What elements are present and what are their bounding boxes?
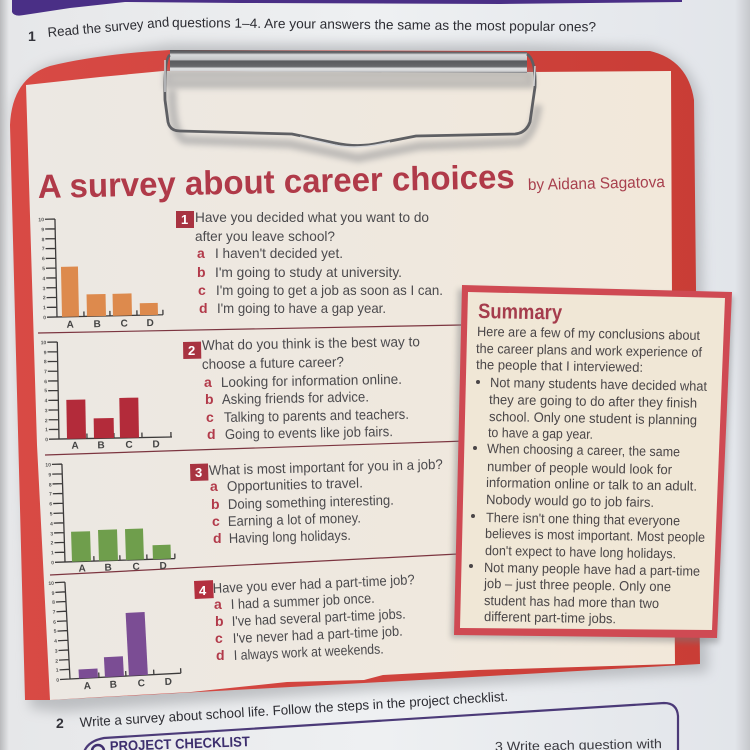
bar chart 2: B xyxy=(97,440,105,451)
bar chart 2: 8 xyxy=(44,359,47,365)
bar chart 3: A xyxy=(78,563,86,575)
bar chart 3: B xyxy=(104,563,112,574)
panel: summary: There isn't one thing that everyone xyxy=(486,510,680,528)
bar chart 1: 8 xyxy=(42,237,45,243)
bar chart 3: 7 xyxy=(49,491,52,497)
instruction 1: 1 xyxy=(28,28,36,44)
panel: summary: the career plans and work experience of xyxy=(476,341,702,360)
question 3: Doing something interesting. xyxy=(228,492,394,512)
bar chart 2: 2 xyxy=(45,418,48,424)
clipboard board xyxy=(10,50,700,700)
bar chart 2: 9 xyxy=(44,350,47,356)
instruction 2: Write a survey about school life. Follow the steps in the project checklist. xyxy=(79,689,508,730)
question 1: after you leave school? xyxy=(195,228,335,244)
question 3: d xyxy=(213,530,222,546)
question 1: I'm going to get a job as soon as I can. xyxy=(216,282,443,298)
question 1: b xyxy=(197,264,206,280)
bar chart 1: 10 xyxy=(38,217,44,223)
question 1: d xyxy=(199,300,208,316)
bar chart 3: 3 xyxy=(50,531,53,537)
bar chart 4 xyxy=(48,574,182,694)
bar chart 3: C xyxy=(132,562,140,573)
bar chart 4: 5 xyxy=(54,629,57,635)
question 1: Have you decided what you want to do xyxy=(195,209,429,225)
bar chart 1: 5 xyxy=(42,266,45,272)
bar chart 4: 6 xyxy=(53,620,56,626)
bar chart 3: 9 xyxy=(48,472,52,478)
bar chart 4: D xyxy=(164,677,172,688)
bar chart 3: 0 xyxy=(51,560,54,566)
question 4: Have you ever had a part-time job? xyxy=(212,571,415,596)
question 3: a xyxy=(210,478,218,494)
bar chart 3: 5 xyxy=(50,511,53,517)
panel: summary: believes is most important. Most people xyxy=(485,526,705,545)
bar chart 2: D xyxy=(152,439,160,450)
title: A survey about career choices xyxy=(37,159,515,206)
bar chart 3: 8 xyxy=(49,482,52,488)
question 3: What is most important for you in a job? xyxy=(209,456,443,478)
bar chart 3: D xyxy=(159,561,167,572)
bar chart 1: 4 xyxy=(42,276,45,282)
question 4: I had a summer job once. xyxy=(230,590,375,612)
panel: summary: the people that I interviewed: xyxy=(476,357,643,375)
bar chart 1: 6 xyxy=(42,256,45,262)
question 2: 2 xyxy=(188,343,195,358)
panel: summary: student has had more than two xyxy=(484,593,659,611)
bar chart 4: 4 xyxy=(54,639,57,645)
question 2: b xyxy=(205,391,214,407)
panel: summary: Not many students have decided what xyxy=(490,375,707,394)
bar chart 3: 6 xyxy=(49,501,52,507)
bar chart 1 xyxy=(38,215,163,331)
question 2: Looking for information online. xyxy=(221,371,402,390)
question 2: a xyxy=(204,374,212,390)
bar chart 2: 3 xyxy=(45,408,48,414)
panel: summary: school. Only one student is planning xyxy=(489,409,697,428)
bar chart 2: A xyxy=(71,441,79,452)
bar chart 4: 9 xyxy=(52,591,55,597)
question 3: 3 xyxy=(195,465,202,480)
bar chart 2: 10 xyxy=(41,340,47,346)
question 4 xyxy=(194,571,415,663)
panel: summary: different part-time jobs. xyxy=(484,609,616,626)
clip shadow xyxy=(168,74,538,158)
panel: summary: information online or talk to an adult. xyxy=(486,475,697,494)
question 2: Going to events like job fairs. xyxy=(225,423,393,442)
bar chart 3: 2 xyxy=(51,540,54,546)
question 4: I always work at weekends. xyxy=(233,640,384,663)
bar chart 1: D xyxy=(146,318,154,329)
bar chart 2: 6 xyxy=(44,379,47,385)
bar chart 2: 1 xyxy=(45,427,48,433)
question 2: What do you think is the best way to xyxy=(202,333,420,353)
panel: summary xyxy=(451,285,734,643)
question 3 xyxy=(190,456,443,546)
question 1: I'm going to have a gap year. xyxy=(217,300,386,316)
wire loop xyxy=(165,54,535,147)
question 2: choose a future career? xyxy=(202,354,344,372)
bar chart 4: 0 xyxy=(56,678,59,684)
panel: summary: to have a gap year. xyxy=(488,425,593,442)
question 1 xyxy=(176,209,443,316)
question 4: I've had several part-time jobs. xyxy=(231,605,406,629)
question 4: b xyxy=(215,613,224,629)
question 2: Talking to parents and teachers. xyxy=(224,406,409,425)
bar chart 3 xyxy=(45,459,175,576)
purple header band xyxy=(12,0,682,16)
bar chart 1: B xyxy=(93,319,101,330)
question 3: Earning a lot of money. xyxy=(228,510,361,529)
bar chart 3: 1 xyxy=(51,550,54,556)
question 2: c xyxy=(206,409,214,425)
bar chart 1: 9 xyxy=(41,227,44,233)
bar chart 4: 2 xyxy=(55,659,58,665)
bar chart 2: 0 xyxy=(45,437,48,443)
question 4: I've never had a part-time job. xyxy=(232,623,403,646)
question 4: a xyxy=(214,596,222,612)
panel: summary: number of people would look for xyxy=(487,459,673,477)
bar chart 4: 3 xyxy=(55,649,58,655)
bar chart 2: 4 xyxy=(45,398,48,404)
bar chart 1: C xyxy=(120,319,128,330)
question 3: Opportunities to travel. xyxy=(227,474,363,494)
question 4: 4 xyxy=(199,583,207,598)
question 4: c xyxy=(215,630,223,646)
question 2: Asking friends for advice. xyxy=(222,388,369,407)
bar chart 1: 2 xyxy=(43,295,46,301)
bar chart 4: B xyxy=(109,680,117,691)
project checklist box xyxy=(84,703,678,750)
question 1: I'm going to study at university. xyxy=(215,264,402,280)
bar chart 2: 5 xyxy=(44,388,47,394)
bar chart 4: 7 xyxy=(53,610,56,616)
question 4: d xyxy=(216,647,225,663)
question 2: d xyxy=(207,426,216,442)
question 1: I haven't decided yet. xyxy=(215,245,343,261)
panel: summary: they are going to do after they finish xyxy=(489,392,697,411)
question 3: Having long holidays. xyxy=(229,527,351,546)
panel: summary: Here are a few of my conclusions about xyxy=(477,324,700,343)
bar chart 1: 7 xyxy=(42,246,45,252)
bar chart 1: 3 xyxy=(43,286,46,292)
bar chart 1: 0 xyxy=(43,315,46,321)
instruction 1: questions 1–4. Are your answers the same as the most popular ones? xyxy=(172,15,596,34)
question 3: c xyxy=(212,513,220,529)
bar chart 1: A xyxy=(66,320,74,331)
bar chart 2 xyxy=(41,338,172,452)
bar chart 3: 10 xyxy=(45,462,51,469)
bar chart 4: 8 xyxy=(52,600,55,606)
bar chart 1: 1 xyxy=(43,305,46,311)
question 1: 1 xyxy=(181,212,188,227)
bar chart 4: 10 xyxy=(48,581,54,587)
question 1: a xyxy=(197,245,205,261)
panel: summary: When choosing a career, the same xyxy=(487,441,680,459)
bar chart 2: C xyxy=(125,440,133,451)
question 1: c xyxy=(198,282,206,298)
panel: summary: Not many people have had a part-time xyxy=(484,560,700,579)
question 3: b xyxy=(211,496,220,512)
divider lines xyxy=(38,325,466,575)
bar chart 4: C xyxy=(137,678,145,689)
instruction 1 xyxy=(28,14,596,44)
panel: summary: Nobody would go to job fairs. xyxy=(486,492,654,510)
panel: summary: job – just three people. Only one xyxy=(483,576,671,594)
clip bar xyxy=(170,50,527,73)
byline: by Aidana Sagatova xyxy=(528,174,665,194)
instruction 2: 2 xyxy=(56,715,64,731)
bar chart 4: 1 xyxy=(56,668,59,674)
instruction 1: Read the survey and xyxy=(47,14,170,40)
bar chart 2: 7 xyxy=(44,369,47,375)
panel: summary: Summary xyxy=(478,300,563,324)
bar chart 3: 4 xyxy=(50,521,53,527)
panel: summary: don't expect to have long holidays. xyxy=(485,543,676,561)
bar chart 4: A xyxy=(84,681,91,692)
paper sheet xyxy=(26,71,675,700)
question 2 xyxy=(183,333,420,442)
